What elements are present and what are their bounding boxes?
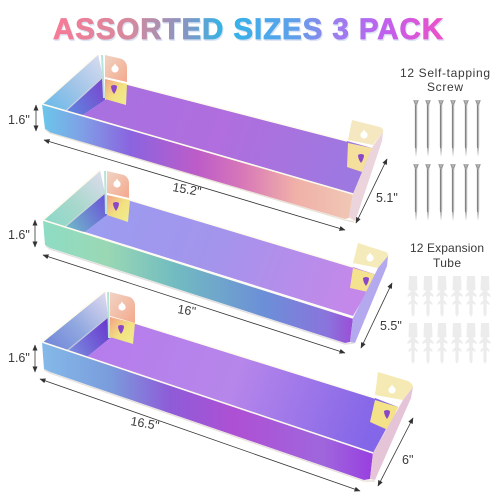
base edge 3: [44, 370, 375, 481]
screws label: 12 Self-tapping: [400, 66, 490, 80]
front wall 1: [42, 104, 353, 219]
shelf 2: [43, 170, 388, 344]
expansion tube label: [410, 241, 484, 270]
floor 1: [83, 84, 372, 194]
dimension labels: 5.1": [376, 191, 398, 205]
left wall 3: [43, 291, 110, 368]
expansion tube label: Tube: [433, 256, 461, 270]
right bracket 2: [350, 243, 388, 292]
expansion tube label: 12 Expansion: [410, 241, 484, 255]
title: ASSORTED SIZES 3 PACK: [53, 13, 444, 46]
expansion tubes: [408, 276, 490, 364]
right bracket 3: [370, 372, 413, 430]
dimension labels: 16.5": [129, 414, 160, 433]
dimension labels: 15.2": [171, 180, 202, 199]
title: ASSORTED SIZES 3 PACK: [54, 14, 445, 48]
left wall 1: [42, 54, 105, 127]
screws: [413, 100, 481, 221]
left bracket 3: [110, 292, 135, 344]
rims 1: [42, 54, 355, 222]
left bracket 2: [107, 171, 130, 222]
left wall 2: [43, 170, 107, 242]
rims 2: [43, 170, 353, 318]
dimension labels: [8, 113, 413, 467]
left bracket 1: [105, 55, 127, 105]
right wall 3: [370, 387, 413, 480]
dimension arrows: [35, 105, 413, 491]
floor 2: [85, 200, 377, 316]
dimension labels: 1.6": [8, 351, 30, 365]
right bracket 1: [347, 120, 383, 172]
screws label: [400, 66, 490, 94]
right wall 1: [349, 132, 383, 222]
right wall 2: [350, 256, 388, 343]
floor 3: [87, 323, 398, 453]
front wall 3: [42, 342, 373, 480]
dimension labels: 1.6": [8, 113, 30, 127]
shelf 1: [42, 54, 383, 222]
rims 3: [42, 291, 375, 453]
front wall 2: [43, 220, 353, 343]
shelf 3: [42, 291, 413, 481]
dimension labels: 5.5": [380, 319, 402, 333]
dimension labels: 6": [402, 453, 413, 467]
base edge 2: [46, 246, 354, 344]
dimension labels: 1.6": [8, 228, 30, 242]
screws label: Screw: [427, 80, 463, 94]
base edge 1: [46, 130, 354, 222]
dimension labels: 16": [177, 302, 197, 319]
